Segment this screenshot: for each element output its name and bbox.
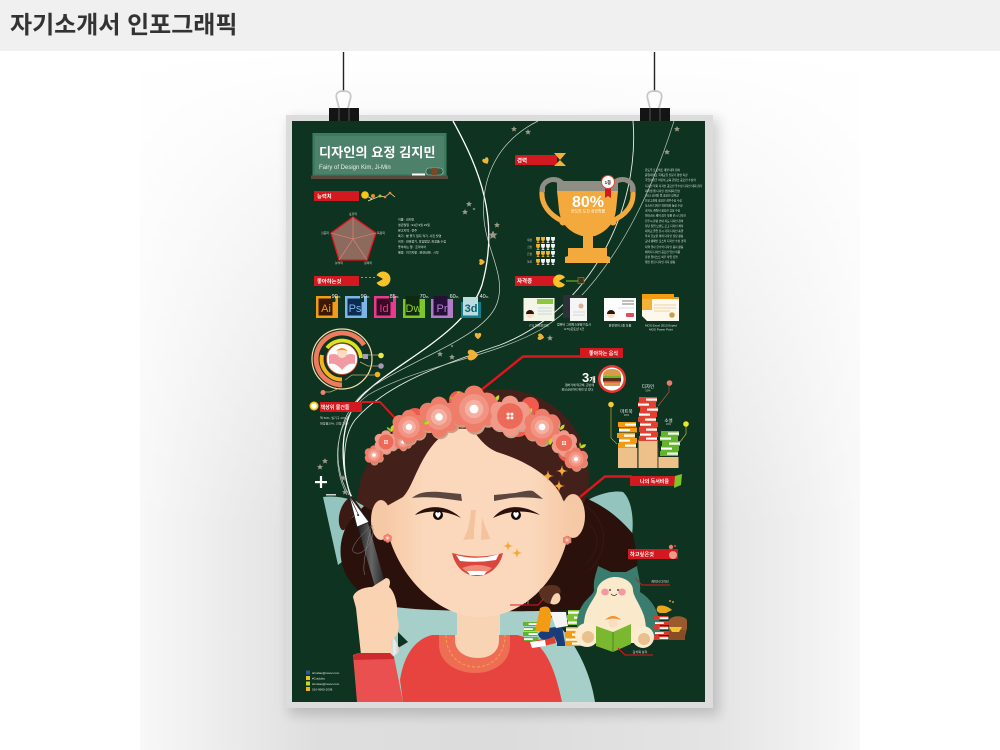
- icon: Dreamweaver: Dw: [406, 303, 421, 315]
- character: sleeping monster with book: [575, 566, 660, 652]
- contact info: #Cutdoby: [312, 676, 325, 680]
- tan bars: [618, 440, 678, 468]
- portrait: nose: [463, 510, 490, 540]
- portrait: eyes: [415, 507, 540, 520]
- section label: certificates: [515, 275, 584, 288]
- icon: Illustrator: Ai: [321, 303, 331, 315]
- section label: ability: 능력치: [317, 192, 332, 200]
- small trophy award rows: 은상: [527, 252, 533, 256]
- callouts: wish items: [510, 578, 670, 655]
- orange book stack: [617, 422, 637, 448]
- flowing lines: [337, 121, 674, 497]
- profile text: [398, 216, 446, 254]
- sleeve: [353, 653, 403, 702]
- section label: favourite food: [480, 348, 623, 391]
- radar chart: 집중력: [321, 231, 329, 235]
- profile text: 이름 : 김지민: [398, 216, 415, 222]
- software skill icons: 60%: [450, 294, 459, 300]
- certificate: MOS: [642, 294, 679, 321]
- chart: reading ratio books: [608, 380, 689, 468]
- section label: wishes: 하고싶은것: [630, 550, 654, 558]
- section label: favourites: 좋아하는것: [317, 277, 341, 285]
- certificates: 컴퓨터 그래픽스운용기능사: [557, 322, 591, 326]
- page title: 자기소개서 인포그래픽: [10, 12, 237, 39]
- chart: reading ratio books: 마트북: [620, 408, 633, 415]
- food text: 햄버거에 떡갈비, 콘빈에: [565, 382, 594, 387]
- career history text: 대학교 졸업 전시 기획 디자인 총괄: [645, 229, 684, 233]
- career history text: 디자인 학회 디자인 공모전 우수상 디자인 대회 참가: [645, 184, 703, 188]
- callouts: wish items: 캐릭터 디자인: [651, 578, 669, 584]
- contact info: 010-9965-2038: [312, 688, 333, 692]
- portrait: ears: [371, 494, 585, 540]
- certificates: GTQ포토샵 1급: [564, 326, 584, 331]
- profile text: 본고지역 : 전주: [398, 228, 417, 232]
- profile text: 좋아하는 말 : 프라이어: [398, 244, 426, 249]
- career history text: 일러스트 페어 참가 작품 전시 디자인: [645, 214, 686, 218]
- portrait: shirt: [400, 635, 562, 702]
- board subtitle: Fairy of Design Kim, Ji-Min: [319, 165, 391, 171]
- section label: certificates: 자격증: [517, 277, 532, 285]
- section label: career: 경력: [517, 156, 527, 164]
- radar chart: 독창력: [377, 231, 385, 235]
- profile text: 생년월일 : 94년 9월 23일: [398, 222, 430, 227]
- icon: InDesign: Id: [379, 303, 389, 315]
- desk items caption: [320, 415, 349, 426]
- career history text: 학과 홍보물 제작 디자인 담당 활동: [645, 234, 684, 238]
- ribbon badge: 1등: [605, 180, 611, 185]
- career history text: 전주시 관광 안내 지도 디자인 참여: [645, 219, 684, 223]
- wall background: [140, 51, 860, 750]
- donut chart: desk items: [312, 329, 384, 395]
- hand holding pen: [353, 578, 399, 655]
- certificates: MOS Power Point: [649, 328, 673, 332]
- header bar: [0, 0, 1000, 51]
- chart: reading ratio books: 디자인: [642, 383, 654, 390]
- chart: reading ratio books: 20%: [666, 422, 672, 426]
- section label: career: [515, 153, 566, 166]
- food text: 불닭소바까지 제일 맛 있다.: [562, 386, 594, 392]
- food text: [562, 370, 596, 392]
- chalkboard title: [311, 133, 448, 179]
- desk items caption: 화장품20%, 인형 10%: [320, 420, 349, 426]
- chart: reading ratio books: 소설: [664, 417, 673, 423]
- profile text: 특기 : 빵 뜰기 일지 적기, 사진 촬영: [398, 233, 442, 238]
- section label: ability: [314, 191, 395, 201]
- small trophy award rows: 대상: [527, 238, 533, 242]
- icon: 3ds Max: 3d: [465, 303, 477, 315]
- teal bow behind portrait: [323, 492, 633, 702]
- sparkles: [503, 465, 568, 558]
- portrait: back hair: [339, 389, 637, 611]
- icon: Premiere: Pr: [436, 303, 448, 315]
- career history text: 지역 행사 현수막 디자인 봉사 활동: [645, 245, 684, 249]
- desk items caption: 책 50%, 필기구 20%: [320, 415, 347, 420]
- software skill icons: 90%: [361, 294, 370, 300]
- food text: 3개: [582, 370, 596, 385]
- section label: favourite food: 좋아하는 음식: [589, 350, 618, 357]
- certificates: ITQ 파워포인트: [529, 322, 549, 328]
- career history text: 중앙대학교 국제교류 전문가 양성 특강: [645, 173, 688, 177]
- icon: Dreamweaver: [403, 296, 425, 318]
- board heading: 디자인의 요정 김지민: [319, 145, 436, 160]
- icon: burger: [598, 365, 626, 393]
- trophy caption: 공모전 도전 성공확률: [571, 208, 606, 214]
- chart: reading ratio books: 30%: [624, 413, 630, 417]
- portrait: mouth: [452, 553, 503, 576]
- trophy: 80 percent success: [540, 176, 635, 263]
- small trophy award rows: [527, 237, 555, 265]
- callouts: wish items: 패션 디자인: [515, 599, 530, 604]
- contact info: shnslau@naver.com: [312, 682, 340, 686]
- radar chart: [321, 212, 385, 265]
- portrait: face: [385, 429, 571, 617]
- section label: reading ratio: 나의 독서비율: [640, 478, 669, 485]
- certificate: driver licence: [604, 298, 636, 321]
- dark notch beside hand: [398, 632, 408, 648]
- certificates: 운전면허 2종 보통: [609, 322, 632, 328]
- earrings: [383, 534, 571, 545]
- contact info: [306, 670, 340, 692]
- certificate: IT: [524, 298, 554, 321]
- section label: wishes: [628, 545, 678, 559]
- icon: Premiere: [431, 296, 453, 318]
- contact info: shnslau@naver.com: [312, 671, 340, 675]
- software skill icons: 40%: [480, 294, 489, 300]
- binder clip left: [329, 52, 359, 121]
- career history text: 국립서천군 어린이 교육 콘텐츠 공모전 수상작: [645, 178, 696, 182]
- profile text: 별명 : 지기지짱 , 뽀얀년짠 , 시작: [398, 250, 439, 254]
- career history text: 2015 모바일 앱 공모전 장려상: [645, 194, 679, 198]
- pen: [349, 495, 401, 657]
- portrait: eyebrows: [412, 491, 543, 501]
- icon: 3ds Max: [461, 297, 481, 318]
- red book stack: [638, 397, 658, 441]
- career history text: 웹진 편집 디자인 기자 활동: [645, 260, 676, 264]
- career history text: 인포그래픽 공모전 최우수상 수상: [645, 198, 682, 202]
- binder clip right: [640, 52, 670, 121]
- trophy percentage: 80%: [572, 194, 604, 211]
- poster: [286, 115, 719, 715]
- treasure and lamp: [654, 600, 687, 640]
- career history text: 교내 캠페인 포스터 디자인 수상 경력: [645, 239, 686, 243]
- radar chart: 분석력: [335, 261, 343, 265]
- callouts: wish items: 김치찌 상자: [633, 649, 648, 654]
- certificate: design: [563, 295, 587, 321]
- career history text: 윈도우 프로젝트 개발 대학 참여: [645, 168, 681, 172]
- green book stack: [660, 431, 680, 456]
- career history text: 경기도 캐릭터 공모전 금상 수상: [645, 208, 681, 212]
- software skill icons: 70%: [420, 294, 429, 300]
- certificates: MOS Excel 2010 Expert: [645, 324, 677, 328]
- profile text: 취미 : 만화뽑기, 맛집탐방, 화장품 수집: [398, 238, 446, 244]
- career history text: 대학생 웹 디자인 경진대회 입선: [645, 189, 681, 193]
- certificates: [524, 294, 679, 332]
- chart: reading ratio books: 50%: [645, 388, 651, 392]
- icon: Illustrator: [316, 296, 338, 318]
- section label: favourites: [314, 272, 390, 286]
- section label: desk items: [310, 402, 395, 418]
- software skill icons: [316, 294, 489, 318]
- software skill icons: 90%: [332, 294, 341, 300]
- radar chart: 표현력: [349, 212, 357, 216]
- decorative stars and hearts: [317, 126, 680, 495]
- small trophy award rows: 금상: [527, 245, 533, 249]
- portrait: neck: [457, 600, 500, 660]
- plus and minus marks: [315, 476, 336, 496]
- career history text: [645, 168, 703, 264]
- career history text: 패키지 디자인 공모전 입선 작품: [645, 250, 681, 254]
- career history text: 포스터 디자인 경진대회 동상 수상: [645, 204, 683, 208]
- section label: reading ratio: [580, 474, 682, 497]
- flower crown: [365, 385, 588, 472]
- software skill icons: 85%: [390, 294, 399, 300]
- character: girl reading on books: [523, 585, 586, 649]
- icon: Photoshop: [345, 296, 367, 318]
- radar chart: 창의력: [364, 261, 372, 265]
- small trophy award rows: 동상: [527, 260, 533, 264]
- icon: InDesign: [374, 296, 396, 318]
- section label: desk items: 책상위 물건들: [320, 404, 350, 411]
- career history text: 청년 창업 브랜드 로고 디자인 제작: [645, 224, 684, 228]
- icon: Photoshop: Ps: [349, 303, 362, 315]
- career history text: 출판 일러스트 외주 작업 진행: [645, 255, 678, 259]
